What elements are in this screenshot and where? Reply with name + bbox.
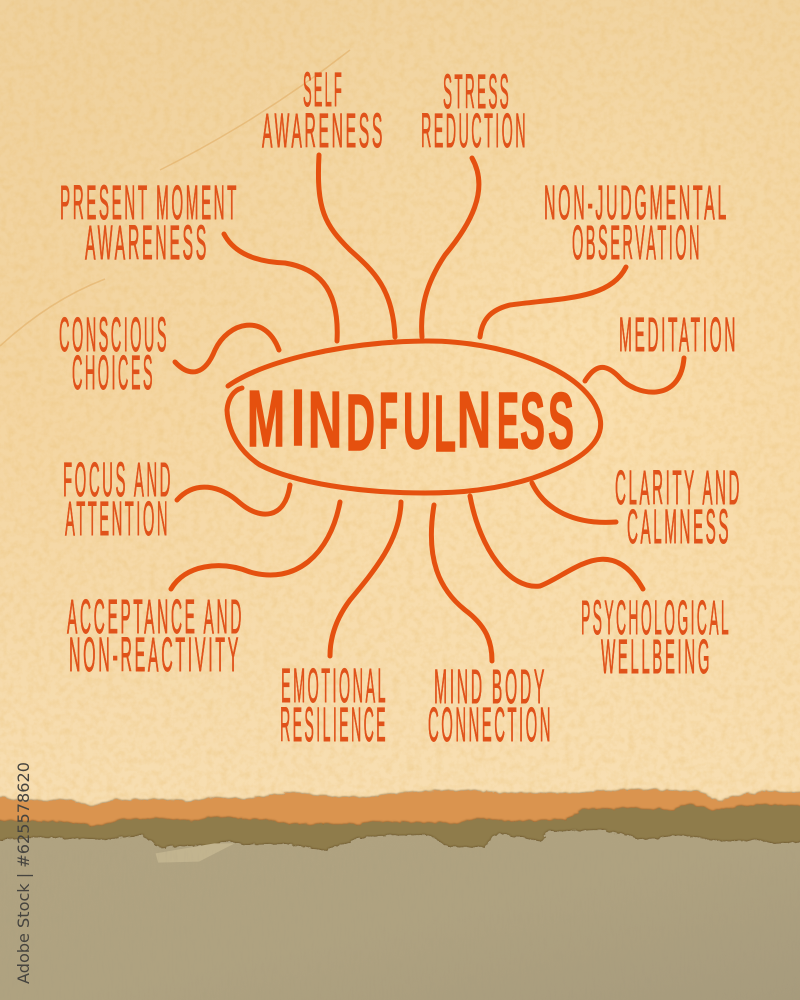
branch: clarity and calmness	[532, 483, 616, 522]
label: non-judgmental observation	[544, 177, 729, 270]
branch: self awareness	[318, 155, 395, 337]
branch: conscious choices	[175, 325, 279, 372]
central oval	[227, 341, 601, 493]
branch: present moment awareness	[224, 234, 337, 341]
label: present moment awareness	[60, 177, 239, 270]
torn flap	[156, 843, 235, 863]
title: MINDFULNESS: U	[403, 376, 431, 465]
branch: meditation	[585, 358, 684, 392]
branch: psychological wellbeing	[470, 496, 643, 589]
label: clarity and calmness	[615, 462, 742, 554]
watermark: stock id: Adobe Stock | #625578620	[14, 762, 33, 984]
label: psychological wellbeing	[581, 592, 731, 684]
layer: olive paper	[0, 804, 800, 893]
title: MINDFULNESS: M	[247, 374, 285, 463]
text: STRESS	[443, 66, 511, 119]
label: self awareness: SELF	[303, 64, 344, 117]
title: MINDFULNESS: S	[520, 376, 545, 465]
branch: mind body connection	[431, 505, 492, 661]
branch: focus and attention	[177, 485, 290, 514]
text: CONSCIOUS	[59, 309, 169, 362]
label: self awareness	[262, 64, 385, 158]
title: MINDFULNESS: N	[308, 375, 342, 464]
text: EMOTIONAL	[281, 660, 388, 713]
text: RESILIENCE	[280, 699, 388, 752]
text: PRESENT MOMENT	[60, 177, 239, 230]
text: AWARENESS	[262, 105, 385, 158]
layer: orange paper	[0, 789, 800, 860]
title: MINDFULNESS: N	[457, 375, 491, 464]
branches	[171, 155, 684, 661]
text: AWARENESS	[85, 217, 209, 270]
label: conscious choices	[59, 309, 169, 400]
text: S	[548, 376, 574, 465]
title: MINDFULNESS: E	[497, 376, 519, 465]
title: MINDFULNESS: F	[379, 376, 398, 465]
text: REDUCTION	[421, 105, 528, 158]
layer: grey-beige paper	[0, 830, 800, 1000]
title: MINDFULNESS: I	[291, 373, 305, 462]
label: emotional resilience	[280, 660, 388, 752]
torn paper layers	[0, 789, 800, 1000]
label: acceptance and non-reactivity	[67, 591, 244, 682]
branch: stress reduction	[422, 158, 479, 337]
title: MINDFULNESS: L	[434, 379, 456, 468]
text: MIND BODY	[434, 661, 547, 714]
text: FOCUS AND	[63, 454, 173, 507]
branch: non-judgmental observation	[480, 267, 626, 337]
text: ATTENTION	[65, 493, 170, 546]
text: ACCEPTANCE AND	[67, 591, 244, 644]
branch: emotional resilience	[330, 502, 401, 656]
label: focus and attention	[63, 454, 173, 546]
label: stress reduction	[421, 66, 528, 158]
branch: acceptance and non-reactivity	[171, 502, 340, 589]
title: MINDFULNESS: D	[346, 378, 375, 467]
text: CHOICES	[72, 347, 155, 400]
text: NON-REACTIVITY	[69, 629, 241, 682]
label: mind body connection	[428, 661, 553, 752]
